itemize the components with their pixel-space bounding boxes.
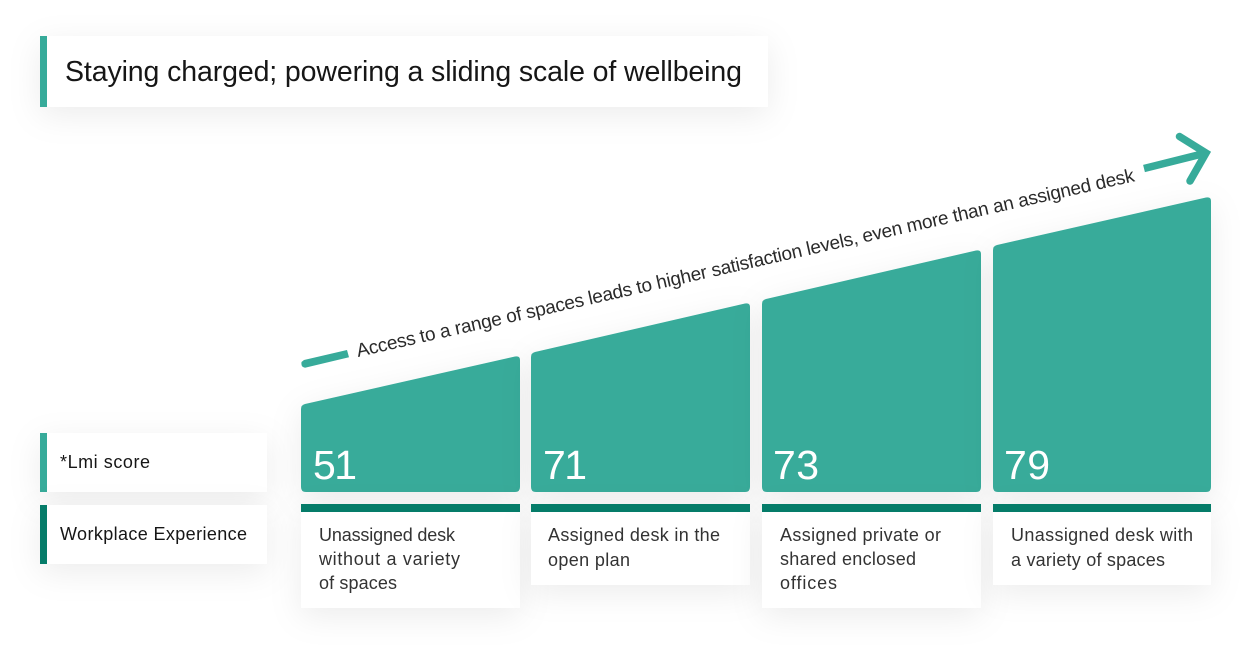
legend: Lmi score: *Lmi score [60, 452, 150, 472]
experience card 1 [301, 504, 520, 608]
legend: Workplace Experience: Workplace Experience [60, 524, 247, 544]
experience card 3: offices [780, 573, 837, 593]
experience card 4: a variety of spaces [1011, 550, 1165, 570]
legend: Lmi score [40, 433, 267, 492]
arrow tail [301, 350, 349, 368]
title: Staying charged; powering a sliding scale of wellbeing [65, 56, 742, 88]
experience card 1: without a variety [318, 549, 460, 569]
experience card 2: Assigned desk in the [548, 525, 720, 545]
column 1: score 51 [301, 356, 520, 492]
column 1: score 51: 51 [313, 442, 357, 488]
column 2: score 71: 71 [543, 442, 587, 488]
experience card 2: open plan [548, 550, 630, 570]
experience card 3: Assigned private or [780, 525, 941, 545]
legend: Workplace Experience [40, 505, 267, 564]
arrow caption: Access to a range of spaces leads to higher satisfaction levels, even more than an assigned desk [354, 165, 1137, 362]
experience card 3 [762, 504, 981, 608]
title panel [40, 36, 768, 107]
experience card 2 [531, 504, 750, 585]
column 3: score 73: 73 [773, 442, 819, 488]
experience card 1: of spaces [319, 573, 397, 593]
column 4: score 79: 79 [1004, 442, 1050, 488]
column 3: score 73 [762, 250, 981, 492]
column 2: score 71 [531, 303, 750, 492]
experience card 3: shared enclosed [780, 549, 916, 569]
experience card 4 [993, 504, 1211, 585]
experience card 1: Unassigned desk [319, 525, 456, 545]
arrow head [1144, 136, 1206, 181]
column 4: score 79 [993, 197, 1211, 492]
experience card 4: Unassigned desk with [1011, 525, 1193, 545]
